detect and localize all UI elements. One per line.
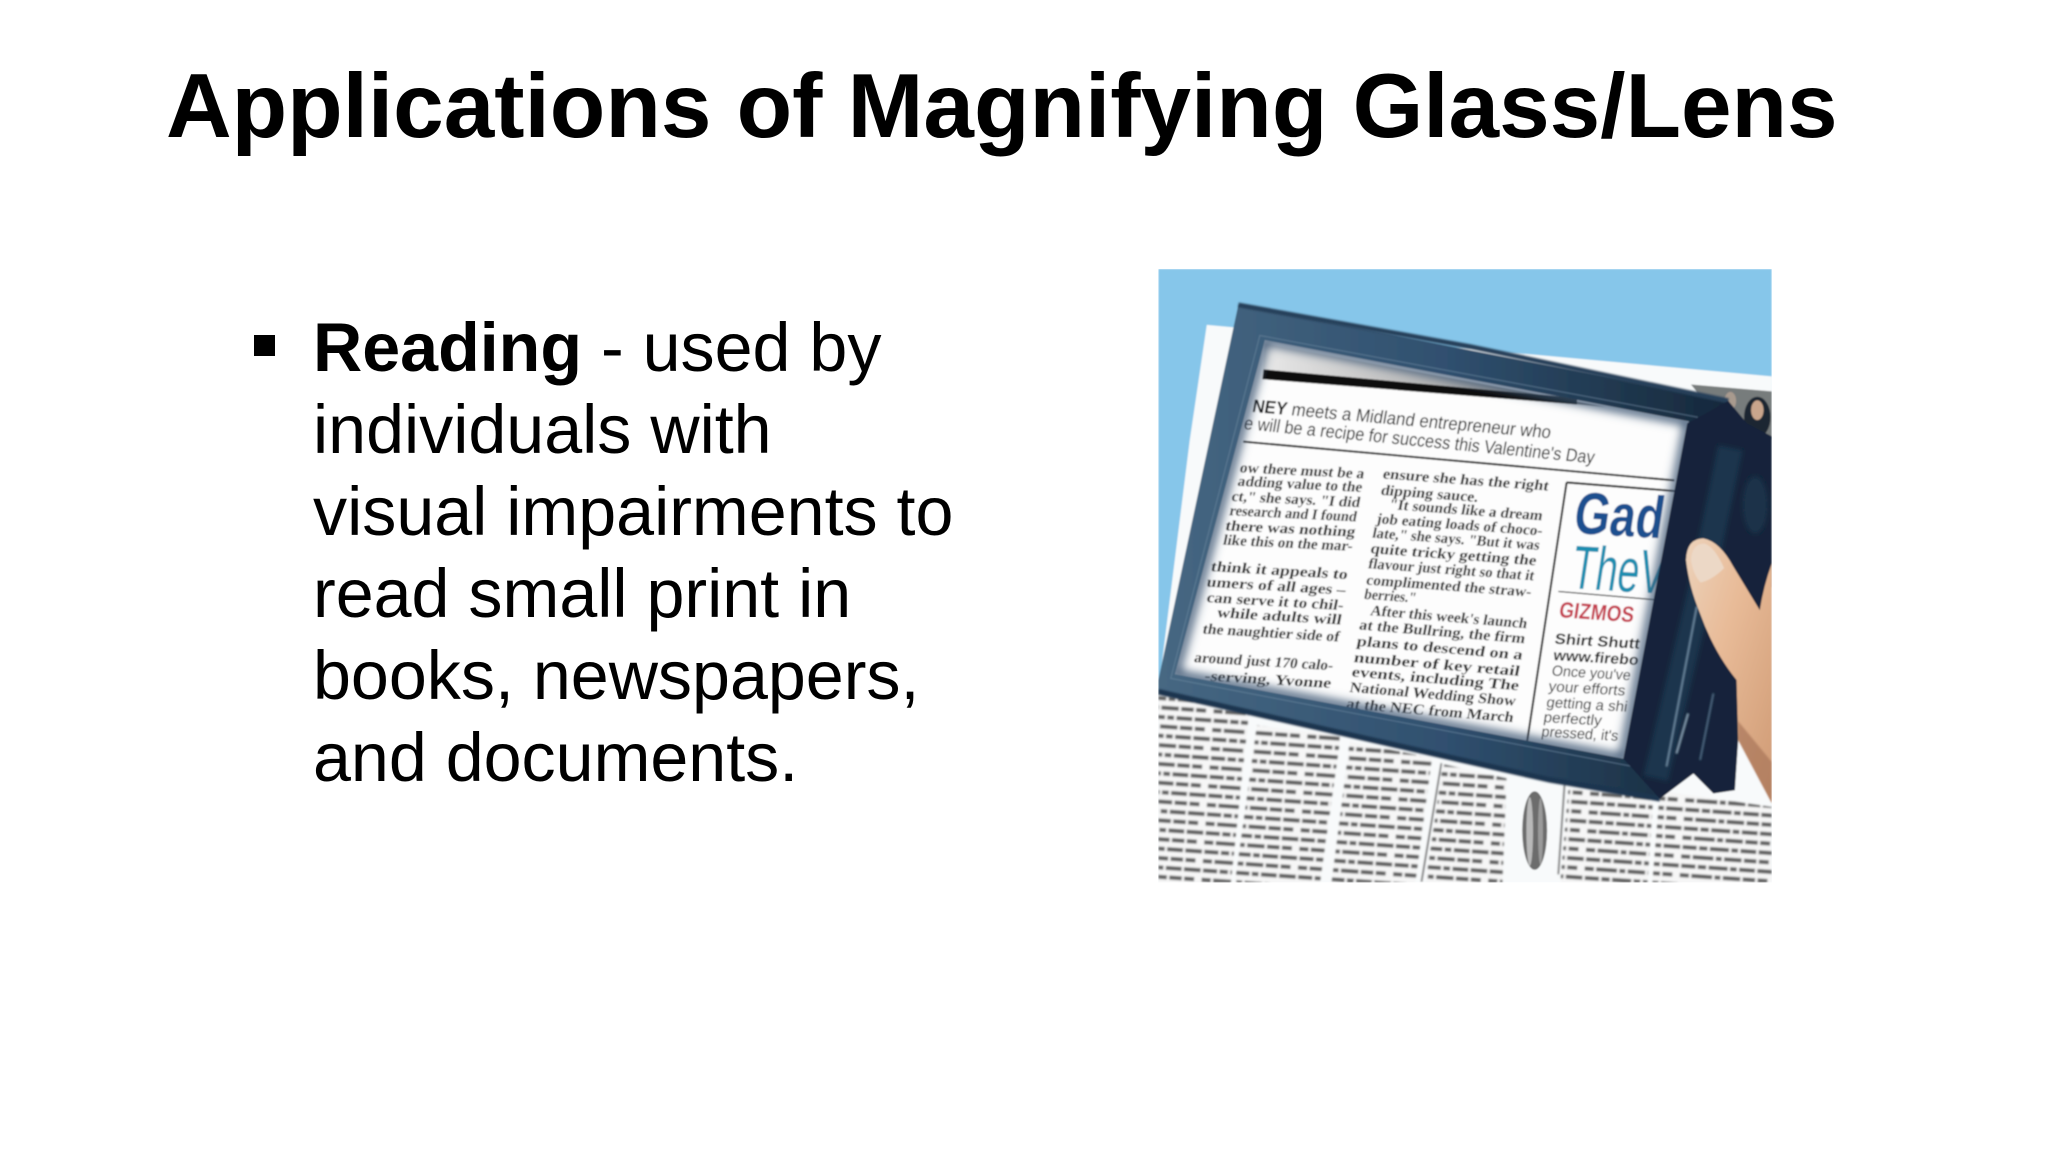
sidebar article text: Once you've xyxy=(1551,664,1632,684)
small figure photo xyxy=(1522,791,1547,870)
newsprint columns xyxy=(1158,693,1772,882)
magnified article column two: plans to descend on a xyxy=(1355,634,1525,664)
sidebar headline Gad: Gad xyxy=(1570,480,1669,551)
magnified article column one: while adults will xyxy=(1216,605,1343,628)
newspaper page xyxy=(1158,325,1772,882)
magnified headline: NEY meets a Midland entrepreneur who xyxy=(1251,395,1553,442)
magnified article column two: ensure she has the right xyxy=(1381,467,1550,495)
lens top reflection band xyxy=(1263,344,1606,407)
magnified headline xyxy=(1243,395,1597,467)
magnified article column one xyxy=(1193,460,1366,692)
magnified article column one: adding value to the xyxy=(1236,474,1364,496)
bullet text: Reading - used by xyxy=(313,310,881,386)
magnified article column two: job eating loads of choco- xyxy=(1374,511,1544,539)
thumbnail xyxy=(1691,544,1724,582)
text block: reading bullet xyxy=(254,310,953,796)
frame lower dark edge xyxy=(1158,692,1660,799)
magnifier handle xyxy=(1623,401,1772,799)
magnified article column two: "It sounds like a dream xyxy=(1388,497,1545,524)
magnified article column one: ct," she says. "I did xyxy=(1230,489,1362,511)
sidebar article text: your efforts xyxy=(1547,679,1626,699)
hand and thumb xyxy=(1686,538,1772,803)
small photos top right xyxy=(1691,384,1772,440)
bullet text: visual impairments to xyxy=(313,474,953,550)
magnified article column two: National Wedding Show xyxy=(1348,680,1517,710)
photo: magnifier over newspaper xyxy=(1158,269,1772,882)
magnified article column two: events, including The xyxy=(1350,665,1521,694)
bullet text: and documents. xyxy=(313,720,798,796)
lens glass xyxy=(1175,340,1689,759)
magnified article column one: research and I found xyxy=(1228,503,1359,525)
bullet text: individuals with xyxy=(313,392,772,468)
bullet marker xyxy=(254,335,275,356)
magnified article column two xyxy=(1345,467,1550,726)
sidebar gizmos label: GIZMOS xyxy=(1558,597,1636,627)
sidebar box xyxy=(1527,482,1674,741)
magnified article column one: umers of all ages – xyxy=(1205,575,1348,599)
magnified article column one: like this on the mar- xyxy=(1222,533,1354,555)
sky blue background xyxy=(1158,269,1772,680)
black rule at top of page xyxy=(1262,369,1577,404)
sidebar article text: perfectly xyxy=(1542,710,1603,729)
magnified article column one: ow there must be a xyxy=(1238,460,1366,482)
magnified article column two: flavour just right so that it xyxy=(1367,556,1536,584)
magnified article column one: think it appeals to xyxy=(1209,559,1349,583)
bullet text: read small print in xyxy=(313,556,851,632)
lens inner shadow xyxy=(1175,340,1689,759)
magnified article column two: dipping sauce. xyxy=(1379,483,1480,506)
headline rule xyxy=(1243,442,1674,480)
magnified headline: e will be a recipe for success this Valentine's Day xyxy=(1243,412,1597,467)
magnified article column one: -serving, Yvonne xyxy=(1203,669,1333,692)
sidebar rule xyxy=(1558,591,1654,600)
frame top dark edge xyxy=(1238,305,1728,401)
magnified article column one: the naughtier side of xyxy=(1201,622,1342,646)
magnified article column two: at the Bullring, the firm xyxy=(1358,618,1527,647)
magnified article column one: around just 170 calo- xyxy=(1193,650,1335,674)
sidebar article text xyxy=(1540,632,1641,745)
sidebar article text: www.firebo xyxy=(1551,648,1640,669)
magnified article column two: berries." xyxy=(1363,587,1418,607)
magnified article column two: number of key retail xyxy=(1352,650,1521,680)
magnified article column two: quite tricky getting the xyxy=(1369,541,1538,569)
magnified article column two: After this week's launch xyxy=(1369,603,1529,632)
magnifier frame xyxy=(1158,305,1743,799)
magnified article column one: can serve it to chil- xyxy=(1205,590,1345,614)
sidebar article text: getting a shi xyxy=(1545,695,1629,716)
bullet text: books, newspapers, xyxy=(313,638,919,714)
title: Applications of Magnifying Glass/Lens xyxy=(166,56,1838,157)
magnified article column one: there was nothing xyxy=(1224,518,1357,541)
magnifier frame bevel xyxy=(1171,336,1697,766)
bullet text xyxy=(313,310,953,796)
magnified article column two: at the NEC from March xyxy=(1345,696,1516,726)
sidebar article text: Shirt Shutt xyxy=(1554,632,1641,653)
sidebar article text: pressed, it's xyxy=(1540,724,1619,745)
sidebar headline The: TheV xyxy=(1567,534,1671,607)
magnified article column two: late," she says. "But it was xyxy=(1371,526,1541,554)
magnified article column two: complimented the straw- xyxy=(1365,573,1533,601)
lower palm shading xyxy=(1738,721,1772,803)
